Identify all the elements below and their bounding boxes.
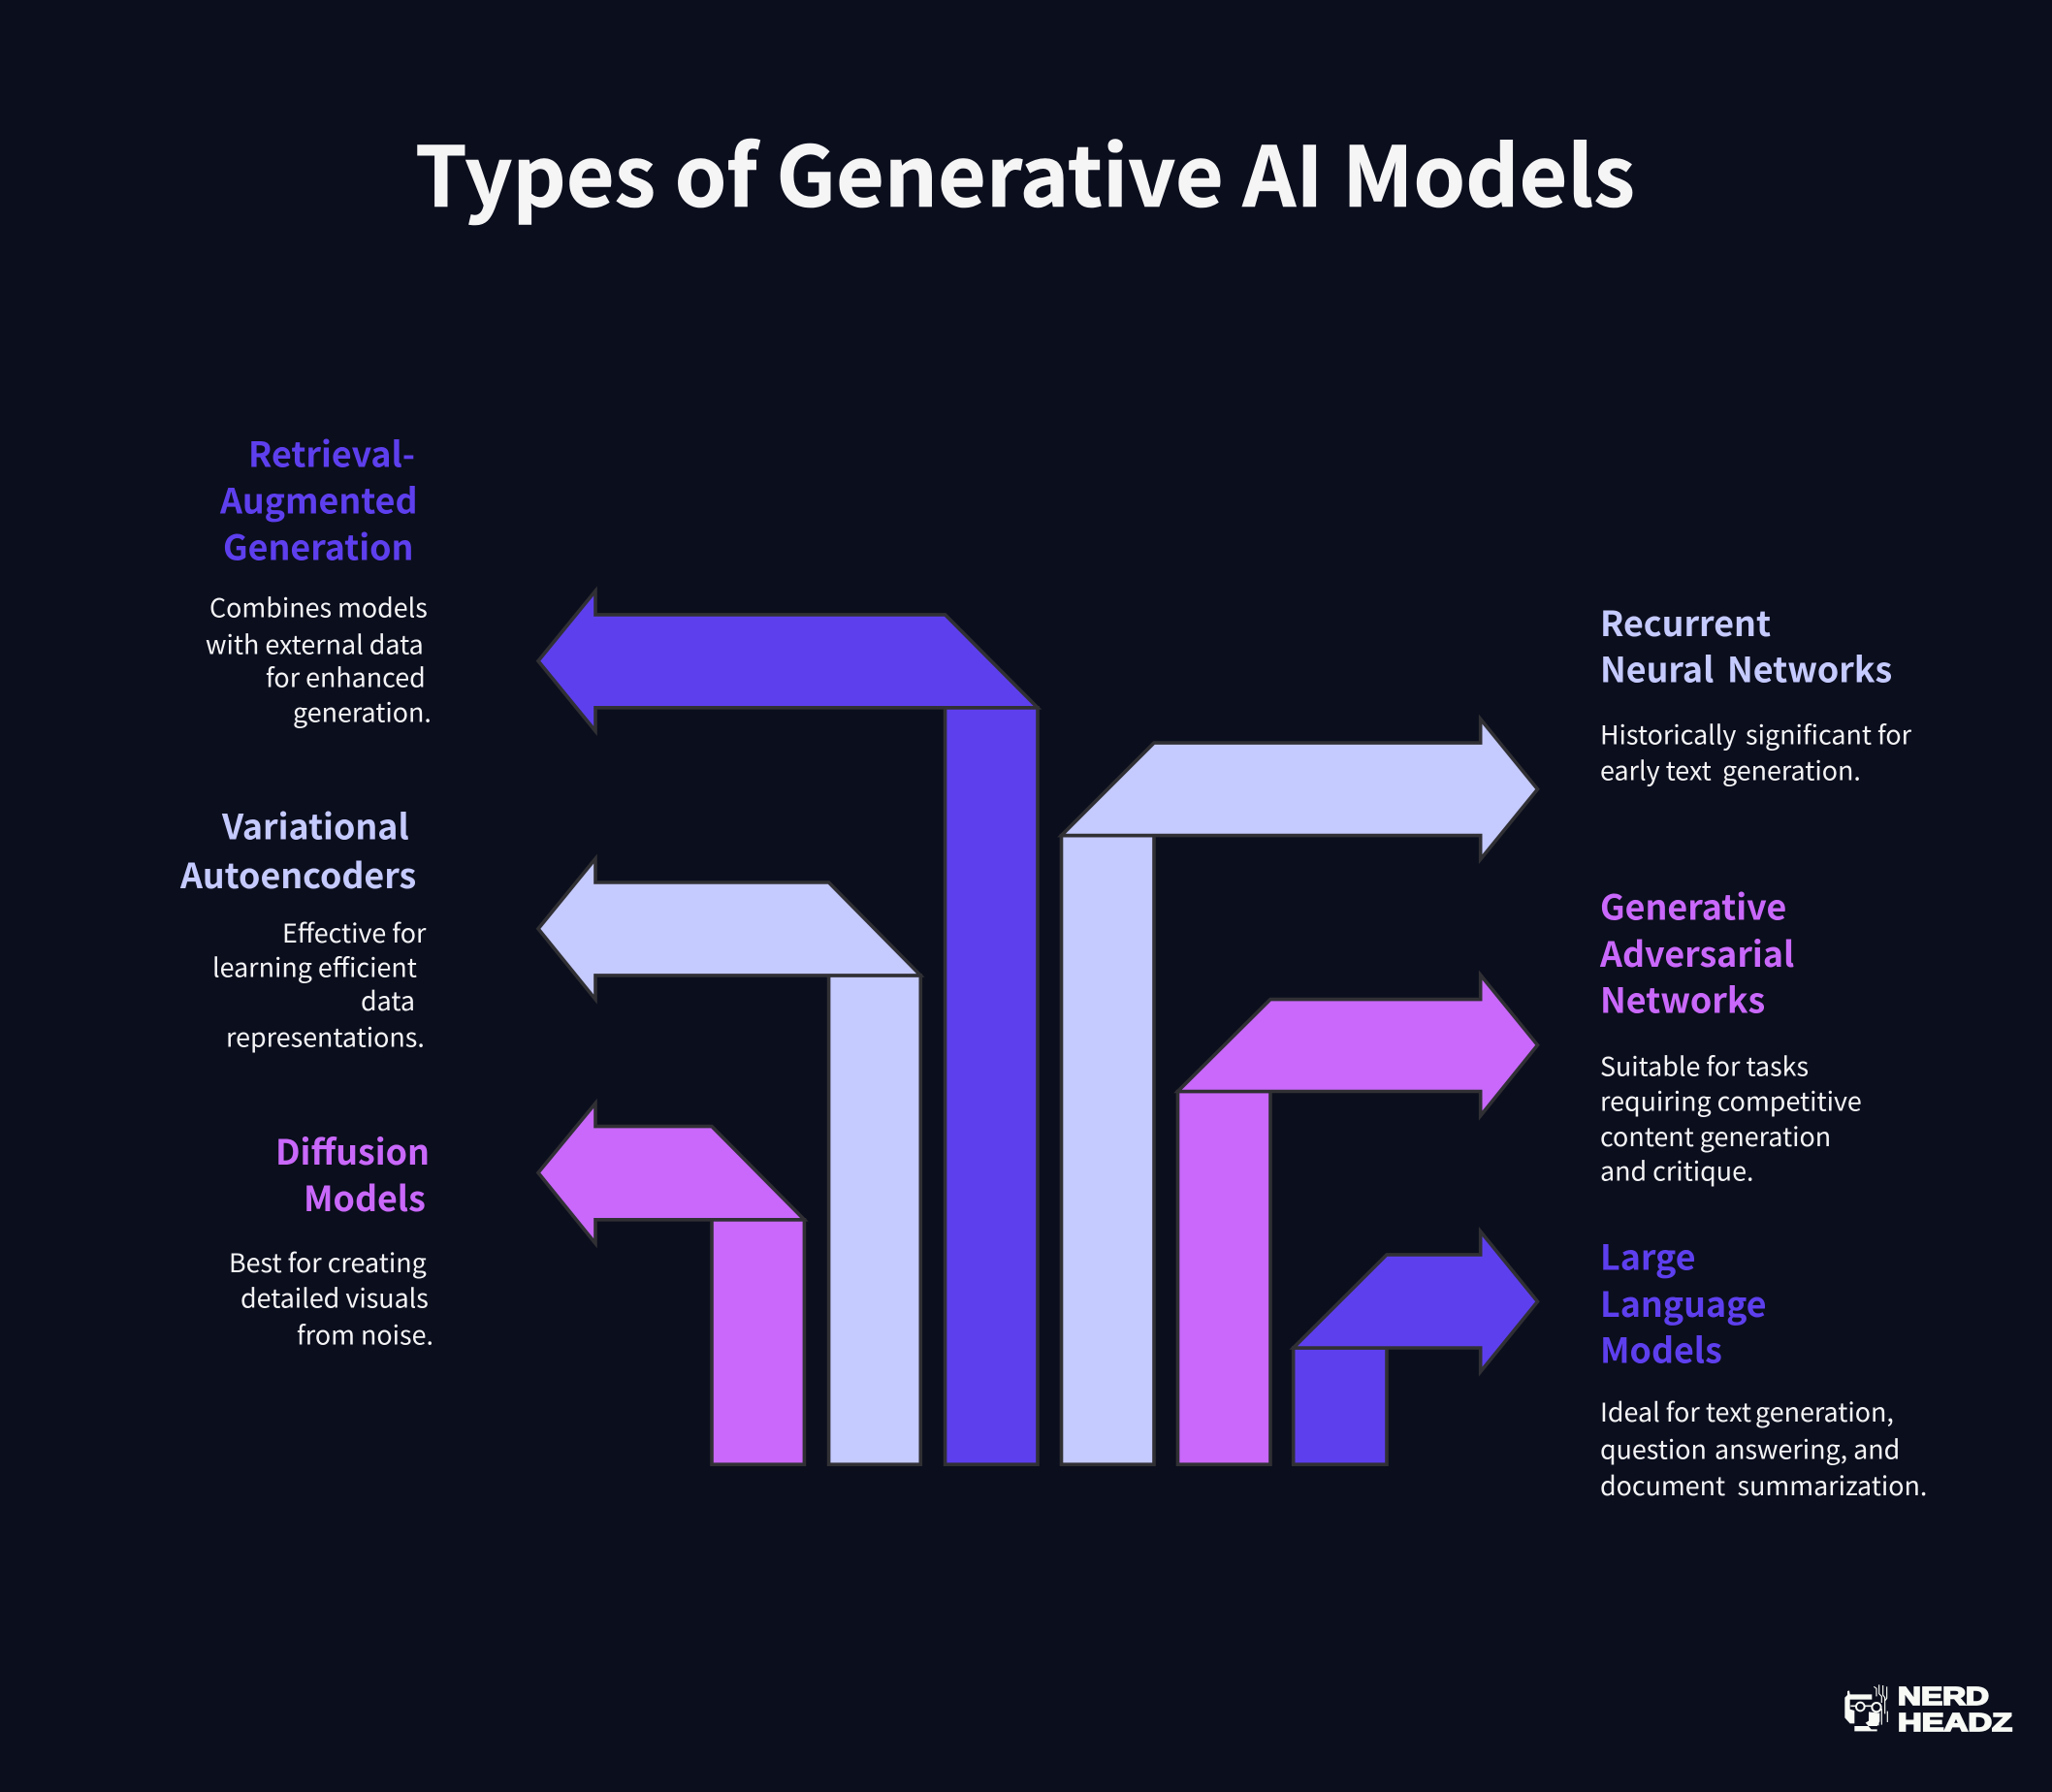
text: Diffusion Models description: Best for creating: [229, 1242, 427, 1280]
text: Generative Adversarial Networks description: and critique.: [1600, 1150, 1753, 1189]
wordmark: HEADZ: [1898, 1708, 2012, 1737]
heading: Recurrent Neural Networks: Recurrent: [1600, 596, 1771, 647]
heading: Retrieval-Augmented Generation: Augmented: [219, 474, 418, 525]
heading: Generative Adversarial Networks: Generative: [1600, 880, 1786, 931]
heading: Large Language Models: [1600, 1231, 1767, 1374]
text: Large Language Models description: summarization.: [1738, 1465, 1927, 1503]
arrow: Recurrent Neural Networks: [1061, 720, 1538, 1464]
arrow: Large Language Models: [1294, 1232, 1538, 1464]
text: Variational Autoencoders description: learning efficient: [212, 946, 417, 985]
text: Retrieval-Augmented Generation description: for enhanced: [266, 657, 426, 694]
text: Generative Adversarial Networks description: content generation: [1600, 1116, 1831, 1154]
text: Retrieval-Augmented Generation description: generation.: [293, 692, 432, 729]
text: Large Language Models description: document: [1600, 1465, 1725, 1503]
panel: Recurrent Neural Networks: [1600, 596, 1912, 787]
text: Large Language Models description: Ideal for text: [1600, 1392, 1751, 1429]
heading: Retrieval-Augmented Generation: Retrieval-: [248, 428, 415, 478]
heading: Recurrent Neural Networks: Networks: [1727, 643, 1892, 693]
heading: Large Language Models: Language: [1600, 1277, 1767, 1328]
heading: Recurrent Neural Networks: Neural: [1600, 643, 1714, 693]
text: Recurrent Neural Networks description: significant for: [1746, 714, 1912, 752]
text: Large Language Models description: answering, and: [1715, 1429, 1900, 1466]
heading: Variational Autoencoders: Variational: [221, 800, 409, 850]
heading: Generative Adversarial Networks: Networks: [1600, 974, 1765, 1024]
heading: Variational Autoencoders: [179, 800, 416, 899]
arrow: Diffusion Models: [538, 1104, 804, 1464]
text: Diffusion Models description: detailed visuals: [240, 1278, 429, 1315]
text: Retrieval-Augmented Generation description: Combines models: [209, 588, 428, 624]
text: Large Language Models description: generation,: [1755, 1392, 1894, 1429]
text: Variational Autoencoders description: representations.: [226, 1016, 425, 1055]
panel: Retrieval-Augmented Generation: [206, 428, 432, 729]
heading: Variational Autoencoders: Autoencoders: [179, 848, 416, 899]
wordmark: [1898, 1681, 2012, 1737]
arrow: Generative Adversarial Networks: [1177, 976, 1538, 1464]
title: Types of Generative AI Models: [415, 110, 1635, 231]
text: Retrieval-Augmented Generation description: with external data: [206, 624, 424, 661]
panel: Variational Autoencoders: [179, 800, 427, 1055]
heading: Diffusion Models: Models: [304, 1171, 426, 1222]
chart: branching arrows: [538, 591, 1538, 1464]
text: Generative Adversarial Networks description: [1600, 1045, 1862, 1189]
text: Large Language Models description: [1600, 1392, 1927, 1503]
heading: Large Language Models: Large: [1600, 1231, 1696, 1281]
heading: Generative Adversarial Networks: Adversarial: [1599, 927, 1794, 977]
text: Recurrent Neural Networks description: [1600, 714, 1912, 787]
heading: Generative Adversarial Networks: [1599, 880, 1794, 1024]
text: Recurrent Neural Networks description: early text: [1600, 751, 1712, 787]
text: Diffusion Models description: from noise.: [297, 1315, 433, 1352]
arrow: Variational Autoencoders: [538, 859, 920, 1464]
heading: Diffusion Models: [275, 1125, 430, 1222]
text: Variational Autoencoders description: data: [361, 980, 415, 1018]
text: Retrieval-Augmented Generation description: [206, 588, 432, 729]
text: Variational Autoencoders description: Effective for: [282, 912, 427, 950]
text: Recurrent Neural Networks description: generation.: [1722, 751, 1861, 787]
panel: Diffusion Models: [229, 1125, 433, 1352]
text: Diffusion Models description: [229, 1242, 433, 1352]
heading: Diffusion Models: Diffusion: [275, 1125, 430, 1175]
text: Variational Autoencoders description: [212, 912, 427, 1055]
icon: owl with glasses: [1844, 1684, 1887, 1731]
text: Recurrent Neural Networks description: Historically: [1600, 714, 1736, 752]
text: Generative Adversarial Networks description: Suitable for tasks: [1600, 1045, 1809, 1084]
text: Generative Adversarial Networks description: requiring competitive: [1600, 1080, 1862, 1119]
heading: Retrieval-Augmented Generation: [219, 428, 418, 571]
heading: Recurrent Neural Networks: [1600, 596, 1892, 693]
panel: Generative Adversarial Networks: [1599, 880, 1862, 1189]
panel: Large Language Models: [1600, 1231, 1927, 1503]
heading: Retrieval-Augmented Generation: Generation: [223, 521, 413, 571]
arrow: Retrieval-Augmented Generation: [538, 591, 1038, 1464]
text: Large Language Models description: question: [1600, 1429, 1707, 1466]
heading: Large Language Models: Models: [1600, 1324, 1722, 1374]
wordmark: NERD: [1898, 1681, 1989, 1711]
logo: Nerd Headz: [1844, 1681, 2012, 1737]
